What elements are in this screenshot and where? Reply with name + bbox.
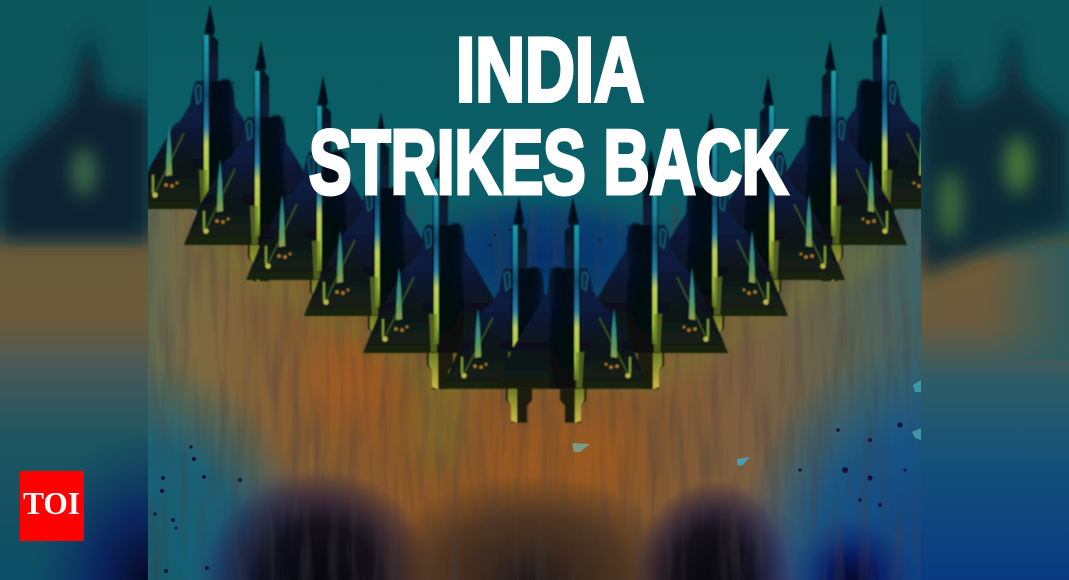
sky and paint background (148, 0, 921, 580)
TOI logo (20, 471, 84, 541)
jet formation (133, 5, 958, 423)
title (309, 20, 788, 214)
right blurred side panel (921, 0, 1069, 580)
jets: right wing of formation (574, 5, 958, 389)
TOI logo: TOI (23, 485, 80, 521)
title: STRIKES BACK (309, 112, 788, 214)
pale paint flecks (572, 380, 921, 466)
paint speckles (153, 229, 907, 573)
title: INDIA (456, 20, 644, 121)
jets: left wing of formation (133, 5, 517, 389)
main poster panel (133, 0, 958, 580)
left blurred side panel (0, 0, 148, 580)
jets: lead pair (442, 197, 650, 423)
